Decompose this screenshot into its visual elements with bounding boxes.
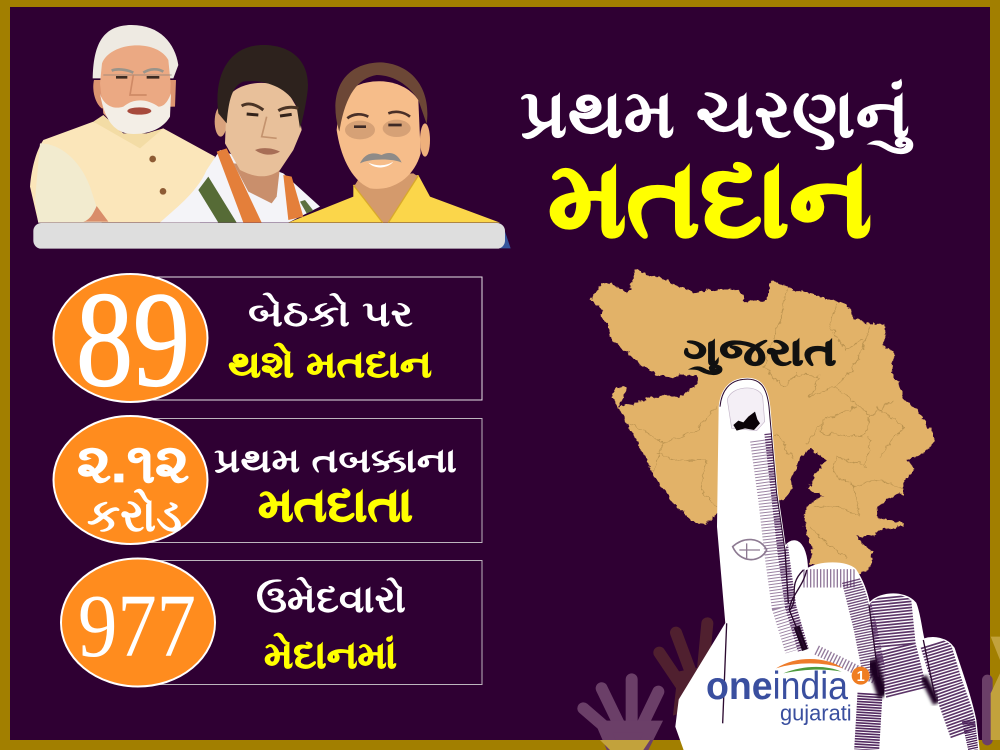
number: 2.12: ૨.૧૨: [77, 434, 189, 494]
panel: 2.12 crore voters: [54, 416, 482, 544]
grey pedestal bar: [33, 223, 505, 249]
number: 977: 977: [78, 577, 196, 676]
title line two: મતદાન: [548, 141, 872, 259]
portrait: Modi: [30, 25, 215, 223]
label: candidates: ઉમેદવારો: [256, 576, 406, 621]
label: seats: બેઠકો પર: [248, 292, 413, 334]
background hands: [583, 623, 1000, 750]
label: first phase: પ્રથમ તબક્કાના: [214, 442, 457, 480]
logo: oneindia gujarati: india: [773, 665, 848, 708]
label: crore: કરોડ: [87, 489, 182, 541]
label: will vote: થશે મતદાન: [228, 342, 432, 385]
blue corner: [500, 227, 511, 248]
label: in the field: મેદાનમાં: [264, 632, 397, 677]
hand with inked finger: [677, 379, 978, 750]
portrait: Rupani: [288, 62, 500, 223]
right illustration: [583, 268, 1000, 750]
portraits group: [30, 25, 511, 249]
map label: ગુજરાત: [683, 331, 837, 376]
panel: 977 candidates: [61, 558, 482, 686]
title line one: પ્રથમ ચરણનું: [520, 76, 914, 155]
logo: oneindia gujarati: one: [706, 665, 773, 708]
portrait: Rahul: [160, 45, 320, 223]
panel: 89 seats: [54, 265, 482, 415]
label: voters: મતદાતા: [258, 479, 413, 531]
map of Gujarat: [590, 268, 935, 575]
logo: oneindia gujarati: [706, 659, 870, 726]
ink mark: [733, 412, 760, 431]
logo: oneindia gujarati: gujarati: [780, 701, 852, 726]
number: 89: 89: [76, 265, 190, 415]
logo: oneindia gujarati: 1: [857, 669, 865, 685]
